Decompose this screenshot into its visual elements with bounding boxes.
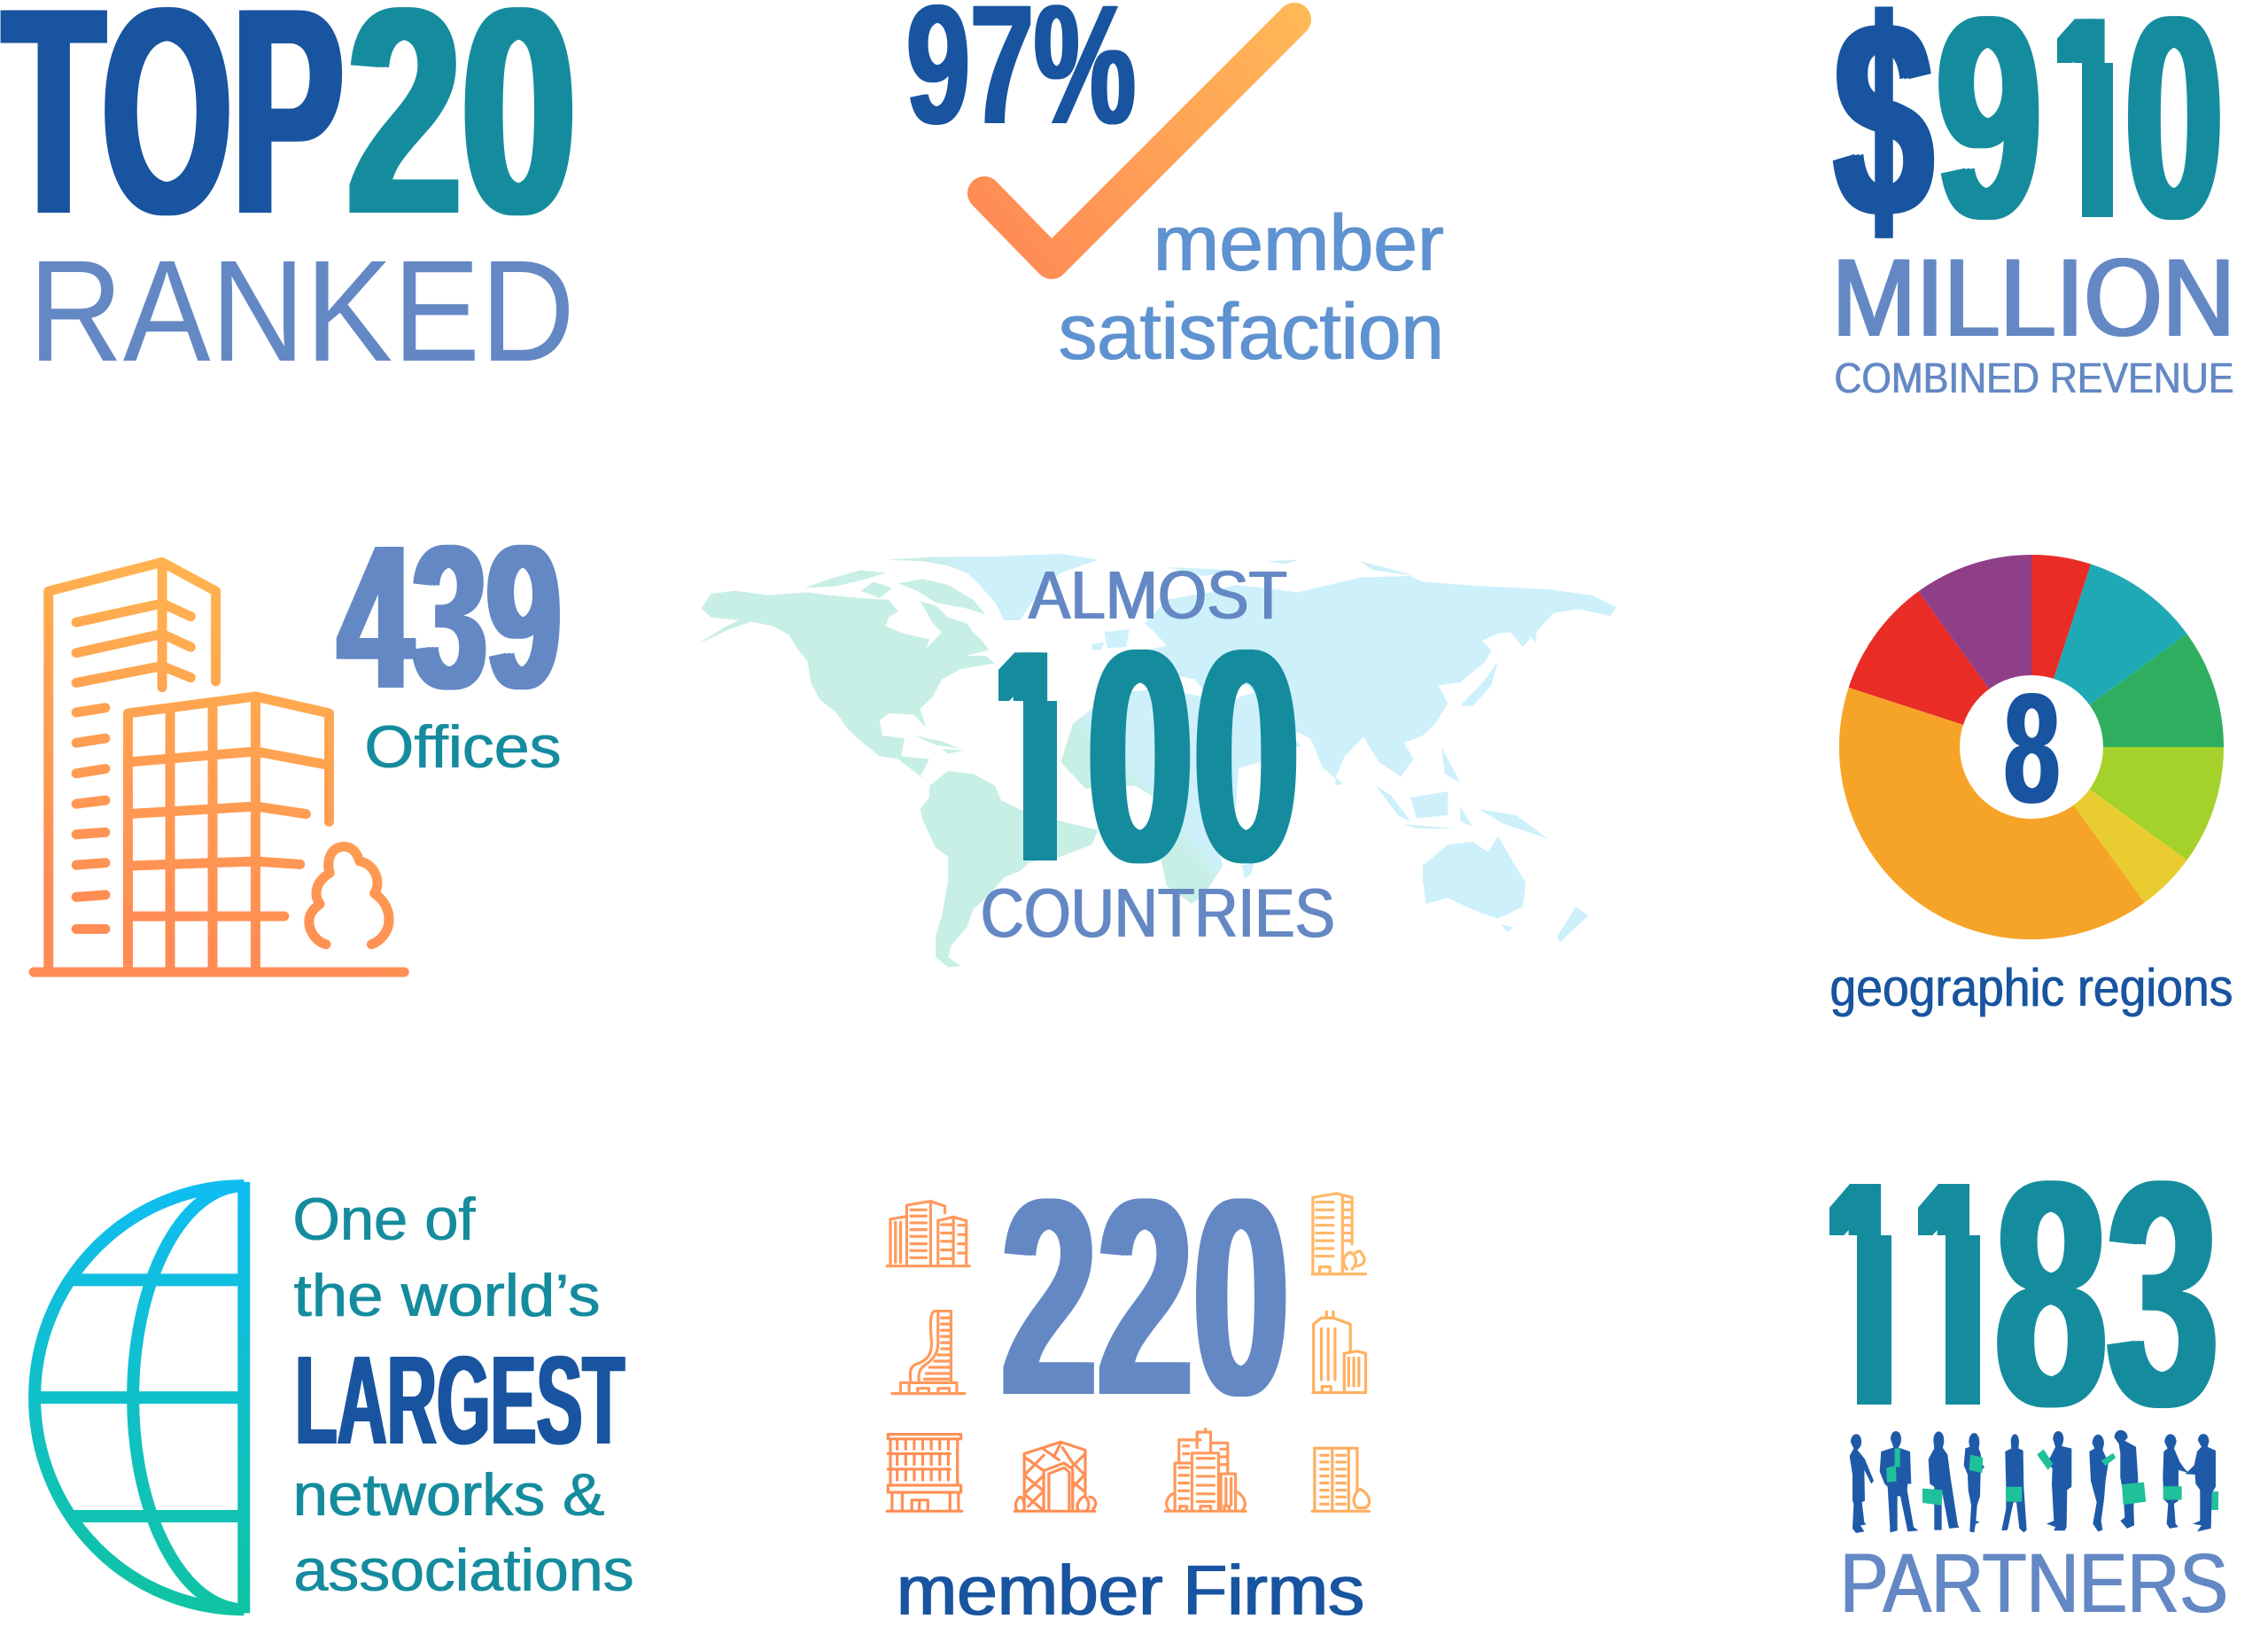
- label: COUNTRIES: COUNTRIES: [980, 874, 1334, 952]
- map: south america: [920, 771, 1098, 968]
- icon: tree: [309, 846, 389, 945]
- map: north america: [698, 570, 995, 783]
- stat: largest networks: [35, 1182, 633, 1613]
- icon: mid-rise block: [887, 1435, 962, 1511]
- segment: green: [2031, 634, 2224, 747]
- stat: top 20 ranked: [3, 0, 576, 392]
- label: COMBINED REVENUE: COMBINED REVENUE: [1834, 355, 2233, 402]
- label: member: member: [1153, 199, 1443, 288]
- number: 910: [1938, 16, 2220, 220]
- text: LARGEST: LARGEST: [295, 1330, 625, 1471]
- label: Offices: Offices: [364, 713, 561, 781]
- icon: cityscape: [1165, 1429, 1246, 1511]
- segment: red large: [1849, 591, 2031, 747]
- icon: twin block tower: [1313, 1311, 1366, 1393]
- icon: arch building: [1014, 1442, 1096, 1511]
- donut hole: [1960, 675, 2103, 819]
- stat: member satisfaction: [906, 0, 1443, 377]
- number: 1183: 1: [1899, 1114, 1999, 1473]
- label: ALMOST: ALMOST: [1028, 557, 1286, 634]
- number: 8: 8: [2004, 662, 2060, 836]
- stat: member firms: [887, 1140, 1370, 1630]
- label: satisfaction: satisfaction: [1058, 288, 1443, 377]
- segment: red small: [2031, 555, 2091, 747]
- stat: countries with world map: [698, 554, 1617, 968]
- number: 100: 1: [975, 588, 1077, 925]
- label: MILLION: MILLION: [1831, 237, 2234, 360]
- icon: slab tower: [1312, 1448, 1370, 1511]
- donut chart: [1839, 555, 2224, 939]
- text: networks &: networks &: [292, 1461, 604, 1529]
- icon: curved tower: [892, 1311, 965, 1394]
- segment: purple: [1918, 555, 2031, 747]
- stat: offices: [34, 502, 561, 972]
- map: greenland: [886, 554, 1098, 620]
- number: 100: 00: [1087, 588, 1300, 925]
- label: RANKED: RANKED: [28, 230, 575, 392]
- number: 1183: [1829, 1180, 2216, 1409]
- stat: combined revenue: [1831, 0, 2234, 402]
- number: 439: 439: [338, 502, 561, 731]
- icon: check mark: [984, 19, 1294, 262]
- people silhouettes: [1850, 1430, 2218, 1533]
- map: eurasia: [1114, 576, 1617, 778]
- number: 1183: 1: [1811, 1114, 1910, 1473]
- text: One of: One of: [292, 1186, 475, 1253]
- number: 100: [998, 649, 1297, 863]
- map: islands: [1091, 560, 1588, 942]
- small building icons: [887, 1194, 1370, 1511]
- icon: tower with trees: [1312, 1194, 1366, 1274]
- label: member Firms: member Firms: [896, 1551, 1363, 1630]
- stat: geographic regions: [1829, 555, 2233, 1017]
- segment: lime: [2031, 747, 2224, 860]
- number: 220: 220: [1001, 1140, 1289, 1453]
- people: [1850, 1430, 2216, 1533]
- map: africa: [1060, 689, 1288, 904]
- text: associations: associations: [293, 1537, 633, 1604]
- icon: half globe: [35, 1182, 250, 1613]
- text: the world's: the world’s: [293, 1262, 600, 1329]
- segment: orange: [1839, 688, 2145, 939]
- folders and briefcases: [1886, 1448, 2182, 1506]
- segment: teal: [2031, 564, 2187, 747]
- folder behind last figure: [2206, 1491, 2218, 1510]
- icon: office buildings: [34, 562, 404, 972]
- stat: partners: [1829, 1180, 2225, 1613]
- icon: building cluster: [887, 1202, 969, 1266]
- world map: [698, 554, 1617, 968]
- segment: yellow: [2031, 747, 2187, 903]
